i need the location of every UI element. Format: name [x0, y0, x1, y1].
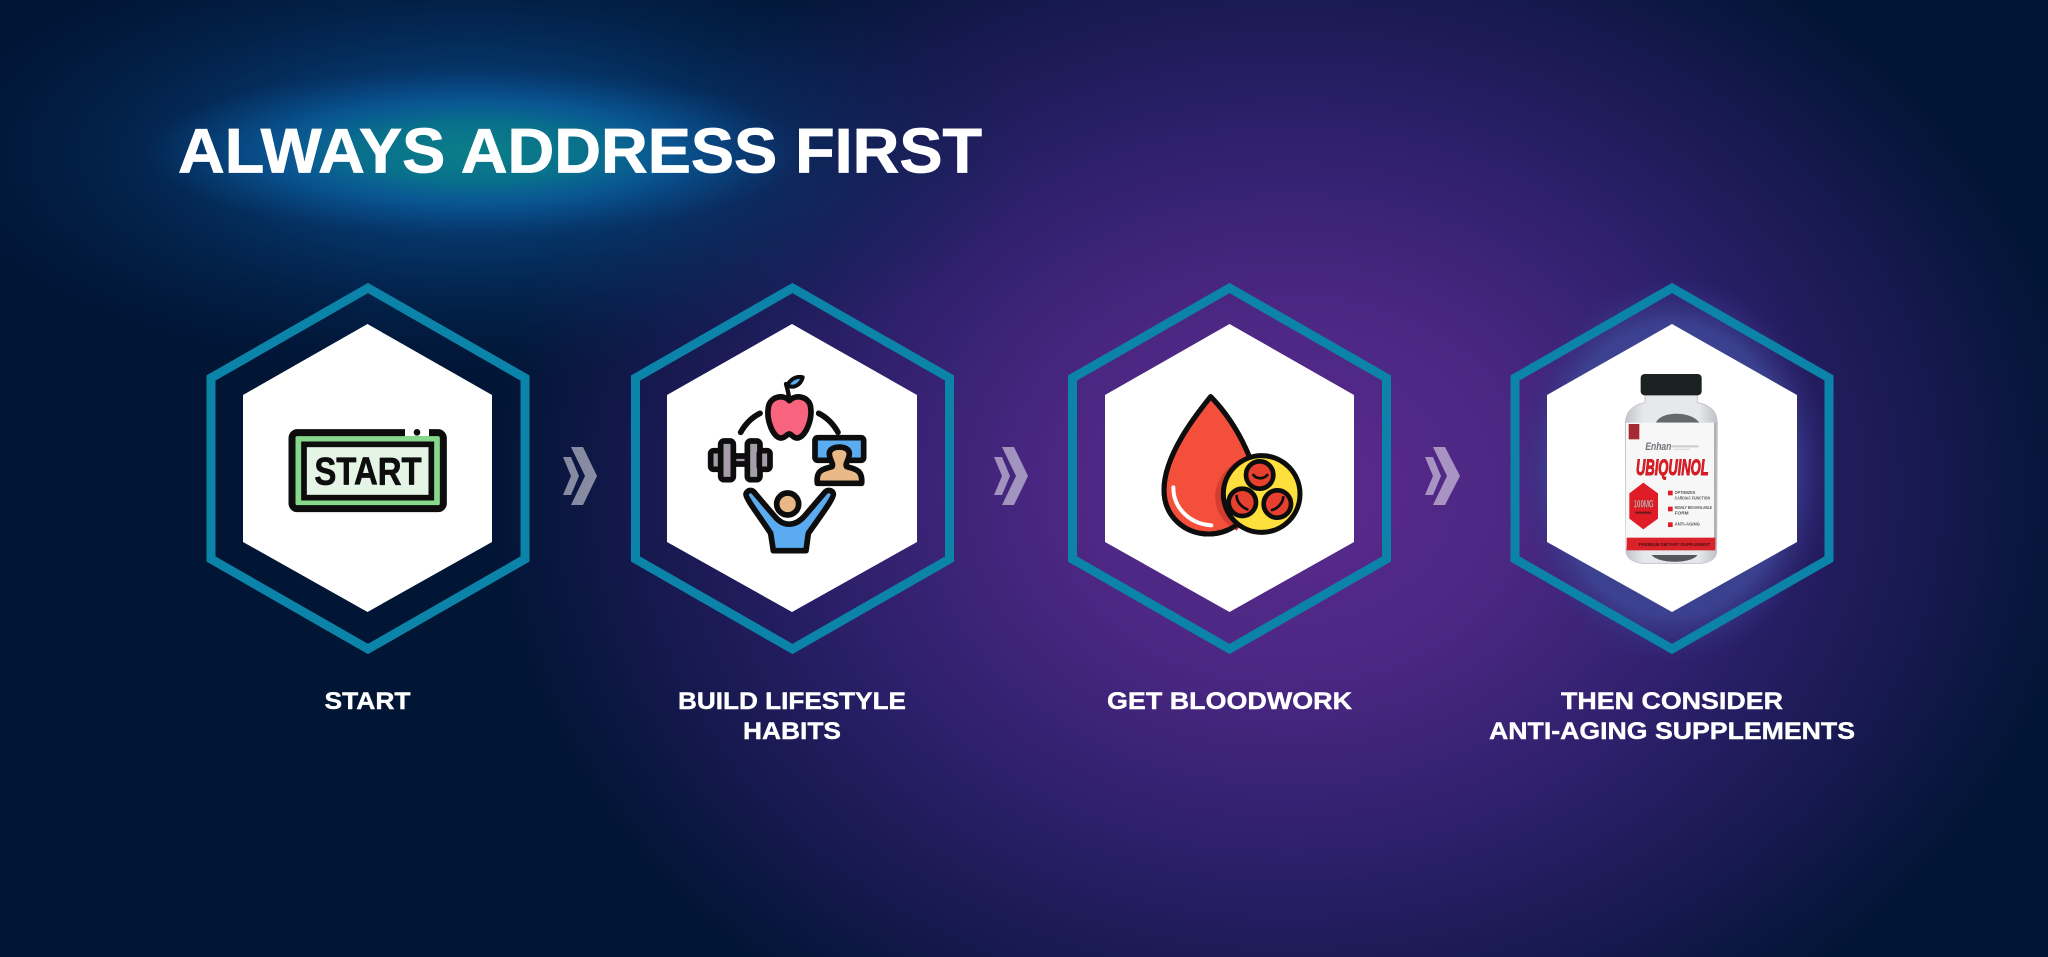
benefit bullets — [1668, 491, 1673, 527]
panel: bloodwork — [1072, 288, 1386, 715]
white hexagon: lifestyle — [667, 324, 917, 612]
hexagon frame: bloodwork — [1072, 288, 1386, 649]
label: build lifestyle habits: HABITS — [743, 718, 841, 745]
red hexagon badge — [1629, 483, 1658, 529]
icon: lifestyle habits — [711, 377, 864, 551]
arrow 1 — [563, 447, 597, 505]
hexagon frame: lifestyle — [636, 288, 950, 649]
dose: 100MG — [1634, 499, 1654, 511]
arrow 3 — [1425, 447, 1460, 505]
cap — [1641, 374, 1702, 395]
label paper — [1626, 423, 1716, 547]
panel: lifestyle habits — [636, 288, 950, 745]
label: build lifestyle habits — [678, 688, 906, 745]
blood cell circle — [1223, 456, 1300, 532]
raised arms figure — [746, 490, 833, 551]
label: get bloodwork: GET BLOODWORK — [1107, 688, 1353, 715]
icon: start button — [292, 427, 443, 509]
icon: supplement bottle: HIGHLY BIOAVAILABLE — [1675, 505, 1712, 510]
panel: supplements — [1489, 288, 1855, 745]
icon: supplement bottle: ANTI-AGING — [1675, 521, 1701, 526]
label: then consider anti-aging supplements: ANTI-AGING SUPPLEMENTS — [1489, 718, 1855, 745]
red band — [1627, 538, 1715, 550]
hexagon frame: start — [211, 288, 525, 649]
white hexagon: bloodwork — [1105, 324, 1354, 612]
screen person — [815, 438, 864, 483]
capsules — [1656, 414, 1699, 423]
dumbbell — [711, 441, 770, 480]
white hexagon: start — [243, 324, 492, 612]
arrow 2 — [994, 447, 1028, 505]
icon: start button: START — [314, 450, 422, 494]
logo — [1629, 424, 1639, 439]
icon: supplement bottle: CARDIAC FUNCTION — [1675, 495, 1710, 500]
title: ALWAYS ADDRESS FIRST — [178, 116, 982, 186]
apple — [768, 377, 811, 438]
icon: supplement bottle: FORM — [1675, 511, 1689, 516]
icon: blood drop — [1164, 397, 1300, 534]
bottle glass — [1625, 393, 1717, 563]
icon: supplement bottle: PREMIUM DIETARY SUPPLEMENT — [1639, 542, 1711, 547]
drop — [1164, 397, 1257, 534]
label: build lifestyle habits: BUILD LIFESTYLE — [678, 688, 906, 715]
label: start: START — [324, 688, 411, 715]
icon: supplement bottle: OPTIMIZES — [1675, 490, 1695, 495]
white hexagon: supplements — [1547, 324, 1797, 612]
icon: supplement bottle — [1625, 374, 1717, 563]
brand: Enhan — [1645, 441, 1672, 453]
label: then consider anti-aging supplements — [1489, 688, 1855, 745]
hexagon frame: supplements — [1515, 288, 1829, 649]
label: then consider anti-aging supplements: THEN CONSIDER — [1561, 688, 1783, 715]
panel: start — [211, 288, 525, 715]
product name: UBIQUINOL — [1636, 455, 1709, 480]
